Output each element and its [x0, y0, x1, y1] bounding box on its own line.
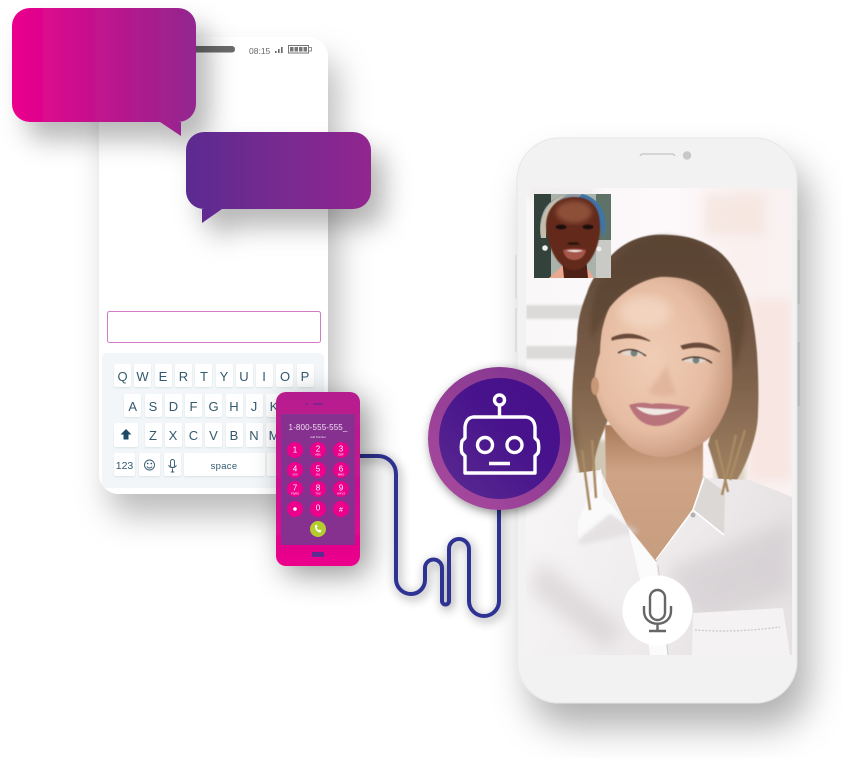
- right collar: [693, 476, 725, 535]
- icon: emoji key: [144, 460, 154, 470]
- eyebrows: [612, 334, 720, 352]
- left collar: [578, 468, 623, 536]
- on-screen keyboard: E: [159, 369, 168, 384]
- phone: video call: [515, 138, 800, 703]
- keypad: 0: [316, 504, 321, 512]
- ear: [591, 377, 599, 395]
- on-screen keyboard: Y: [220, 369, 229, 384]
- eyes: [556, 225, 594, 229]
- status bar: 08:15: [249, 46, 271, 56]
- neck: [605, 425, 703, 562]
- keypad: 9: [339, 484, 344, 492]
- keypad: PQRS: [291, 492, 299, 496]
- keypad: 3: [339, 444, 344, 454]
- mouth: [563, 248, 586, 260]
- on-screen keyboard: X: [169, 428, 178, 443]
- on-screen keyboard: C: [189, 428, 198, 443]
- home button: [312, 552, 324, 557]
- forehead highlight: [619, 296, 671, 328]
- keypad: 7: [293, 484, 298, 492]
- keypad: JKL: [316, 472, 321, 476]
- thumbnail: second caller: [534, 194, 611, 278]
- on-screen keyboard: O: [280, 369, 290, 384]
- on-screen keyboard: H: [229, 399, 239, 414]
- dialled number: 1-800-555-555_: [288, 423, 348, 432]
- on-screen keyboard: 123: [116, 460, 133, 472]
- icon: shift key: [120, 429, 132, 440]
- eyes: [618, 350, 712, 364]
- head wrap: [540, 194, 605, 238]
- icon: microphone: [644, 590, 671, 631]
- keypad: DEF: [338, 452, 344, 456]
- shirt pocket: [692, 608, 790, 655]
- earpiece speaker: [640, 154, 675, 156]
- keypad: 6: [339, 464, 344, 474]
- phone: dial pad: [276, 392, 360, 566]
- front camera: [683, 151, 691, 160]
- on-screen keyboard: S: [149, 399, 158, 414]
- icon: robot: [461, 395, 539, 473]
- keypad: 5: [316, 464, 321, 474]
- phone: dial pad: Add Number: [310, 435, 326, 439]
- microphone button: [622, 576, 692, 646]
- message input box: [108, 312, 320, 342]
- photo: smiling woman on video call: [526, 188, 792, 655]
- dial screen: [281, 414, 355, 545]
- on-screen keyboard: W: [136, 369, 149, 384]
- earrings: [542, 245, 602, 252]
- speech bubble: pink: [12, 8, 196, 136]
- keypad: [287, 442, 349, 517]
- on-screen keyboard: D: [169, 399, 178, 414]
- shoulders: [549, 266, 594, 278]
- on-screen keyboard: R: [179, 369, 188, 384]
- nose shadow: [650, 368, 674, 396]
- on-screen keyboard: M: [269, 428, 279, 443]
- on-screen keyboard: N: [249, 428, 259, 443]
- keypad: 1: [293, 446, 298, 454]
- on-screen keyboard: U: [239, 369, 249, 384]
- on-screen keyboard: space: [211, 461, 237, 472]
- keypad: 8: [316, 484, 321, 492]
- on-screen keyboard: P: [301, 369, 309, 384]
- face: [594, 277, 732, 457]
- on-screen keyboard: G: [208, 399, 219, 414]
- icon: microphone key: [169, 460, 176, 472]
- robot badge: [428, 367, 571, 510]
- on-screen keyboard: A: [128, 399, 137, 414]
- keypad: MNO: [338, 472, 345, 476]
- chair behind shoulder: [578, 440, 608, 485]
- keypad: 4: [293, 464, 298, 474]
- on-screen keyboard: [102, 353, 324, 488]
- on-screen keyboard: F: [190, 399, 198, 414]
- call button: [310, 521, 326, 537]
- on-screen keyboard: V: [209, 428, 218, 443]
- hair back: [572, 235, 758, 505]
- placket: [628, 527, 668, 655]
- on-screen keyboard: I: [262, 369, 266, 384]
- keypad: WXYZ: [337, 492, 345, 496]
- keypad: GHI: [293, 472, 298, 476]
- face: [546, 197, 600, 270]
- on-screen keyboard: Q: [117, 369, 128, 384]
- keypad: TUV: [315, 492, 321, 496]
- status bar: [190, 46, 312, 56]
- on-screen keyboard: Z: [149, 428, 157, 443]
- on-screen keyboard: T: [200, 369, 208, 384]
- neck: [562, 263, 588, 278]
- earpiece and camera: [306, 398, 323, 404]
- speech bubble: purple: [186, 132, 371, 223]
- mouth: [629, 403, 690, 426]
- keypad: #: [339, 507, 343, 514]
- keypad: ABC: [315, 452, 321, 456]
- on-screen keyboard: J: [251, 399, 257, 414]
- strands: [582, 430, 745, 510]
- keypad: 2: [316, 444, 321, 454]
- on-screen keyboard: B: [230, 428, 238, 443]
- hair top shading: [591, 236, 744, 370]
- on-screen keyboard: K: [270, 399, 279, 414]
- shirt: [566, 470, 792, 655]
- phone: messaging chat: [99, 37, 328, 494]
- connecting cable: [358, 456, 499, 616]
